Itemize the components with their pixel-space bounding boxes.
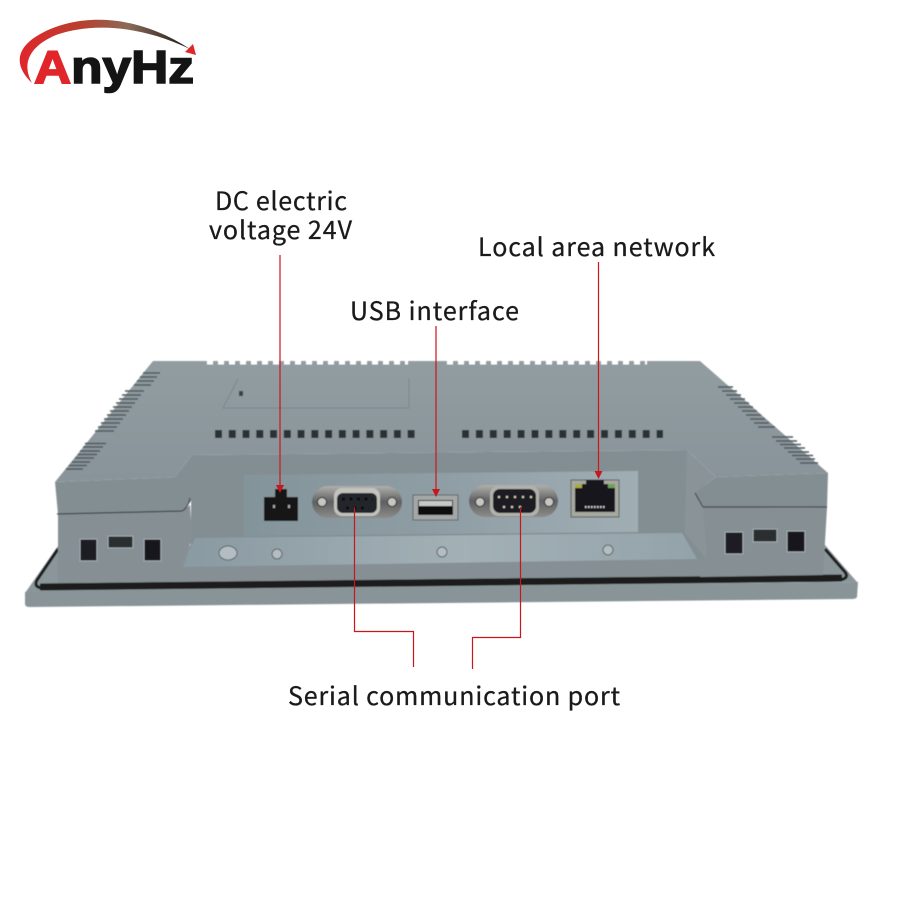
housing top face [55,361,828,482]
left side vents [66,373,160,469]
upper vent row right [462,430,663,438]
bezel front strip [25,582,858,607]
center rear wall [190,450,707,568]
label: Serial communication port: Serial communication port [288,677,621,713]
mounting screws [219,545,613,560]
upper vent row left [215,430,416,438]
label: DC electric voltage 24V: DC electric [215,182,347,218]
leader: serial port right [472,507,520,669]
label: DC electric voltage 24V: voltage 24V [209,211,353,247]
leader: serial port left [354,507,414,667]
battery cover outline [223,378,409,408]
logo wordmark: AnyHz [34,41,194,93]
arrow: LAN leader [594,262,602,479]
right mounting block [685,450,828,577]
arrow: DC power leader [276,255,284,493]
bezel top face [25,545,857,593]
label: USB interface: USB interface [350,292,519,328]
logo: AnyHz [20,20,196,93]
DC power connector [264,489,298,521]
product: HMI panel rear view [25,361,858,607]
right side vents [718,387,818,463]
lower lip [58,559,823,583]
label: DC electric voltage 24V [209,182,353,247]
connector panel [244,471,638,536]
arrow: USB leader [432,326,440,497]
left mounting block [55,455,196,583]
logo swoosh [20,20,190,83]
label: Local area network: Local area network [478,228,715,264]
metal mounting plate [183,533,697,567]
USB port [413,495,458,520]
LAN port [571,480,619,517]
DB9 male port [469,485,558,517]
rubber gasket [36,549,846,588]
logo arrowhead [185,44,196,55]
DB9 female port [312,486,402,518]
top edge vent teeth [207,360,647,364]
